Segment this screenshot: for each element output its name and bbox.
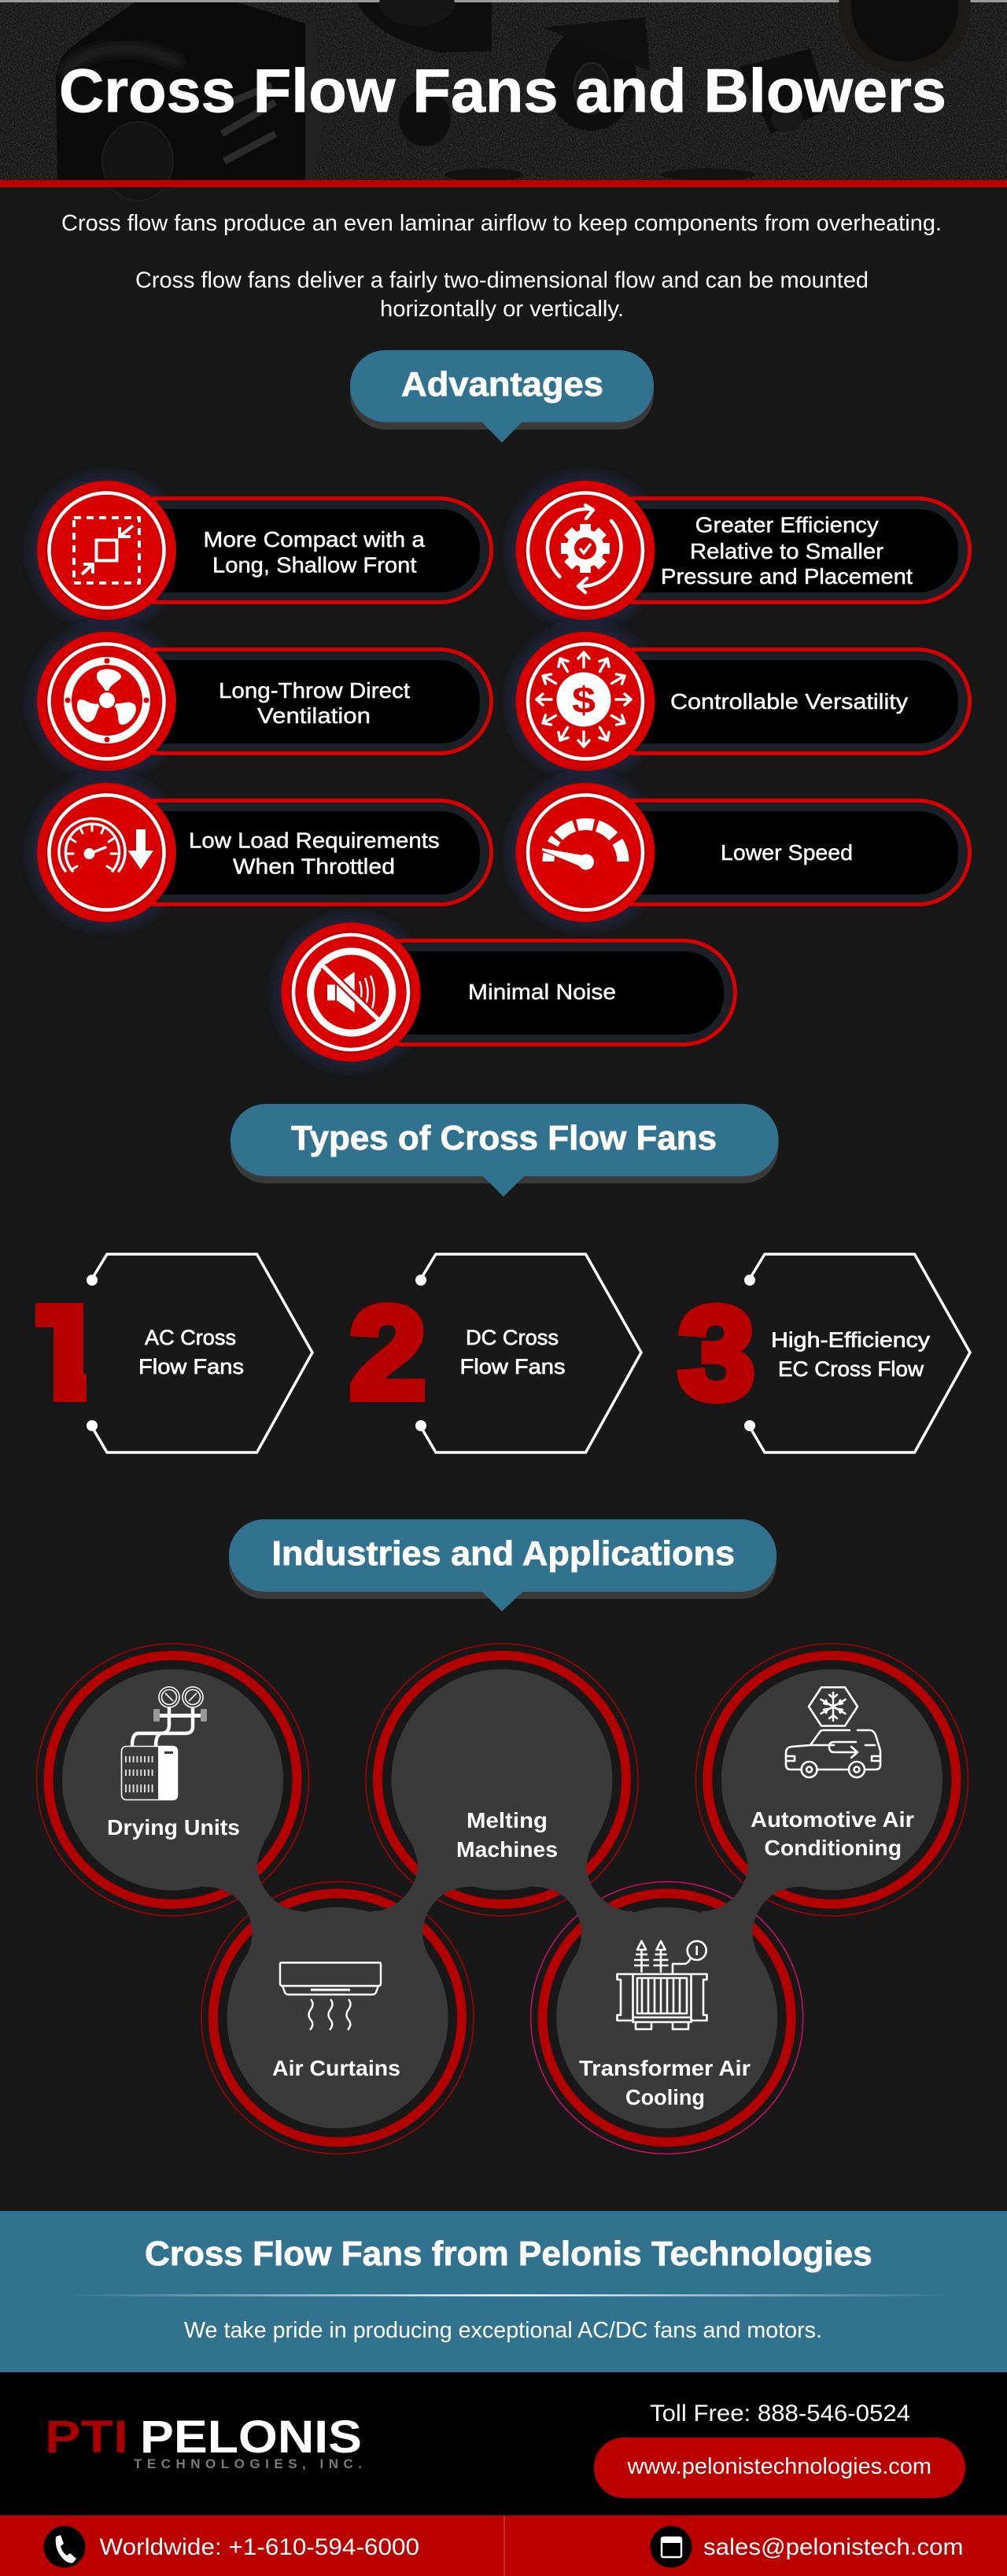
- icon: transformer: [617, 1941, 706, 2029]
- header red rule: [0, 180, 1007, 187]
- application: drying units: Drying Units: [107, 1815, 240, 1840]
- icon: email window: [650, 2526, 692, 2568]
- advantage: greater efficiency: Greater Efficiency: [695, 513, 879, 537]
- icon: wall air unit: [280, 1962, 381, 2030]
- intro paragraph two: Cross flow fans deliver a fairly two-dimensional flow and can be mounted: [135, 268, 869, 293]
- heading: types of cross flow fans: [231, 1104, 779, 1197]
- icon: gear with cycle arrows: [548, 505, 621, 592]
- application: automotive air conditioning: Conditioning: [764, 1836, 902, 1860]
- contact bar: sales@pelonistech.com: [703, 2534, 963, 2560]
- type 2: DC cross flow fans: DC Cross: [466, 1326, 559, 1349]
- application: transformer air cooling: Transformer Air: [579, 2056, 751, 2080]
- toll free number: Toll Free: 888-546-0524: [650, 2401, 910, 2427]
- icon: dollar with radiating arrows: [537, 652, 631, 747]
- type 3: high-efficiency EC cross flow: [678, 1254, 970, 1452]
- icon: car with snowflake: [786, 1687, 880, 1777]
- heading: industries and applications: [229, 1519, 776, 1611]
- advantage: long-throw ventilation: Ventilation: [257, 703, 371, 728]
- logo: PTI: [45, 2412, 128, 2463]
- application: transformer air cooling: Cooling: [625, 2085, 705, 2109]
- advantage: lower speed: Lower Speed: [721, 840, 853, 865]
- type 2: DC cross flow fans: 2: [349, 1281, 426, 1426]
- icon: fan: [65, 658, 149, 743]
- closing band: [0, 2211, 1007, 2372]
- advantage: low load requirements: Low Load Requirements: [189, 829, 440, 853]
- heading: industries and applications: Industries and Applications: [272, 1534, 735, 1573]
- advantage: long-throw ventilation: [28, 623, 491, 781]
- application: melting machines: [392, 1670, 612, 1890]
- contact bar: [0, 2515, 1007, 2576]
- type 2: DC cross flow fans: [349, 1254, 641, 1452]
- type 3: high-efficiency EC cross flow: 3: [678, 1281, 755, 1426]
- intro paragraph one: Cross flow fans produce an even laminar airflow to keep components from overheating.: [61, 211, 942, 236]
- advantage: lower speed: [507, 774, 969, 932]
- icon: speedometer: [541, 824, 623, 870]
- website button: www.pelonistechnologies.com: [627, 2454, 931, 2479]
- title: Cross Flow Fans and Blowers: [59, 56, 946, 125]
- logo: [45, 2412, 362, 2471]
- type 1: AC cross flow fans: AC Cross: [145, 1326, 236, 1349]
- industries network rings: [36, 1644, 968, 2154]
- type 3: high-efficiency EC cross flow: EC Cross Flow: [778, 1357, 924, 1381]
- icon: compact resize: [74, 518, 139, 583]
- logo: TECHNOLOGIES, INC.: [134, 2456, 362, 2471]
- contact panel: [0, 2372, 1007, 2515]
- advantage: controllable versatility: [507, 623, 969, 781]
- icon: muted speaker: [311, 951, 393, 1033]
- industries network connectors: [175, 1810, 830, 1967]
- advantage: low load requirements: When Throttled: [233, 854, 395, 879]
- advantage: greater efficiency: [507, 472, 969, 629]
- header banner: [0, 0, 1007, 201]
- type 1: AC cross flow fans: 1: [28, 1272, 94, 1433]
- advantage: low load requirements: [28, 774, 491, 932]
- icon: gauge with down arrow: [59, 818, 153, 871]
- application: transformer air cooling: [556, 1907, 777, 2128]
- type 1: AC cross flow fans: Flow Fans: [138, 1355, 244, 1378]
- application: melting machines: Machines: [456, 1837, 558, 1862]
- advantage: minimal noise: [272, 913, 735, 1071]
- advantage: long-throw ventilation: Long-Throw Direct: [219, 678, 410, 703]
- type 1: AC cross flow fans: [28, 1254, 312, 1452]
- intro paragraph two: [135, 268, 869, 322]
- website button: [594, 2438, 965, 2498]
- heading: advantages: Advantages: [401, 365, 603, 404]
- application: automotive air conditioning: [721, 1670, 942, 1890]
- closing band: We take pride in producing exceptional AC/DC fans and motors.: [184, 2318, 822, 2343]
- advantage: greater efficiency: Relative to Smaller: [690, 539, 883, 563]
- application: air curtains: Air Curtains: [272, 2056, 400, 2080]
- application: air curtains: [227, 1907, 448, 2128]
- heading: advantages: [350, 350, 654, 442]
- icon: refrigerant gauges and unit: [121, 1687, 207, 1800]
- advantage: more compact: Long, Shallow Front: [212, 553, 417, 578]
- advantage: controllable versatility: Controllable Versatility: [670, 689, 908, 714]
- application: automotive air conditioning: Automotive Air: [751, 1807, 914, 1832]
- intro paragraph two: horizontally or vertically.: [380, 297, 624, 322]
- heading: types of cross flow fans: Types of Cross Flow Fans: [291, 1119, 717, 1157]
- closing band: Cross Flow Fans from Pelonis Technologies: [145, 2235, 872, 2273]
- application: melting machines: Melting: [467, 1808, 548, 1832]
- advantage: greater efficiency: Pressure and Placement: [661, 564, 913, 589]
- icon: phone: [44, 2526, 85, 2568]
- icon: dollar with radiating arrows: $: [572, 679, 596, 721]
- advantage: more compact: [28, 472, 491, 629]
- type 2: DC cross flow fans: Flow Fans: [459, 1355, 565, 1378]
- advantage: more compact: More Compact with a: [203, 527, 425, 552]
- advantage: minimal noise: Minimal Noise: [468, 980, 616, 1004]
- application: drying units: [62, 1670, 283, 1890]
- logo: PELONIS: [140, 2412, 362, 2463]
- type 3: high-efficiency EC cross flow: High-Efficiency: [771, 1328, 931, 1352]
- contact bar: Worldwide: +1-610-594-6000: [99, 2534, 419, 2560]
